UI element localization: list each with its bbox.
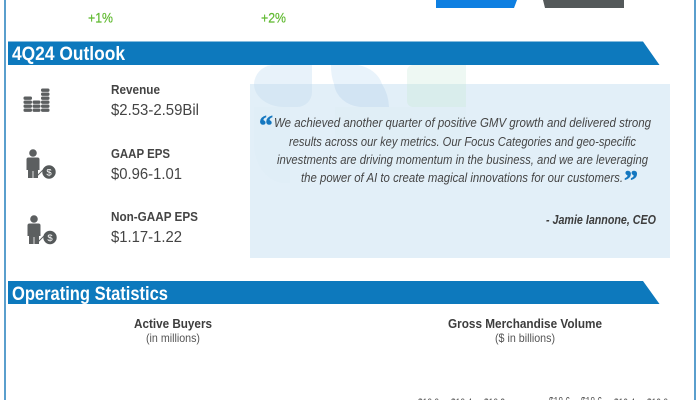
logo shapes seen through the panel [254,84,466,183]
outlook item: Non-GAAP EPS: Non-GAAP EPS [111,209,198,224]
quote text: We achieved another quarter of positive GMV growth and delivered strong [274,115,652,130]
quote background [250,84,670,258]
outlook item: Revenue: $2.53-2.59Bil [111,102,199,119]
quote text: investments are driving momentum in the business, and we are leveraging [277,152,649,167]
section banner: 4Q24 Outlook: 4Q24 Outlook [12,44,125,65]
top strip: growth figures and cropped shapes [88,0,624,26]
chart heading: Gross Merchandise Volume: Gross Merchandise Volume [448,316,602,331]
outlook item: Revenue: Revenue [111,82,160,97]
growth figure: +2%: +2% [261,10,286,26]
chart heading: Active Buyers: Active Buyers [134,316,212,331]
outlook item: GAAP EPS [26,146,182,183]
chart heading: Gross Merchandise Volume [448,316,602,345]
quote text: the power of AI to create magical innovations for our customers. [301,170,623,185]
icon: person with dollar coin: $ [47,233,53,244]
growth figure: +1%: +1% [88,10,113,26]
decorative logo shapes behind quote [254,65,466,84]
outlook item: GAAP EPS: $0.96-1.01 [111,166,182,183]
quote text: results across our key metrics. Our Focus Categories and geo-specific [289,134,636,149]
chart heading: Active Buyers [134,316,212,345]
icon: person with dollar coin [26,149,56,179]
outlook item: Non-GAAP EPS [28,209,198,246]
attribution: - Jamie Iannone, CEO [546,212,656,227]
chart heading: Active Buyers: (in millions) [146,331,200,345]
section banner: Operating Statistics: Operating Statistics [12,284,168,305]
outlook item: GAAP EPS: GAAP EPS [111,146,170,161]
section banner: Operating Statistics [8,281,660,305]
outlook item: Revenue [24,82,199,119]
opening quote mark: “ [259,111,273,142]
cropped grey shape [543,0,624,8]
quote text [274,115,652,185]
icon: person with dollar coin: $ [46,168,52,178]
chart heading: Gross Merchandise Volume: ($ in billions) [495,331,555,345]
cropped blue shape [436,0,517,8]
closing quote mark: ” [624,166,638,197]
icon: coin stacks [24,88,50,112]
section banner: 4Q24 Outlook [8,42,660,65]
panel: CEO quote [250,84,670,258]
icon: person with dollar coin [28,215,57,244]
chart value labels cropped at the bottom edge [418,394,668,400]
outlook item: Non-GAAP EPS: $1.17-1.22 [111,229,182,246]
